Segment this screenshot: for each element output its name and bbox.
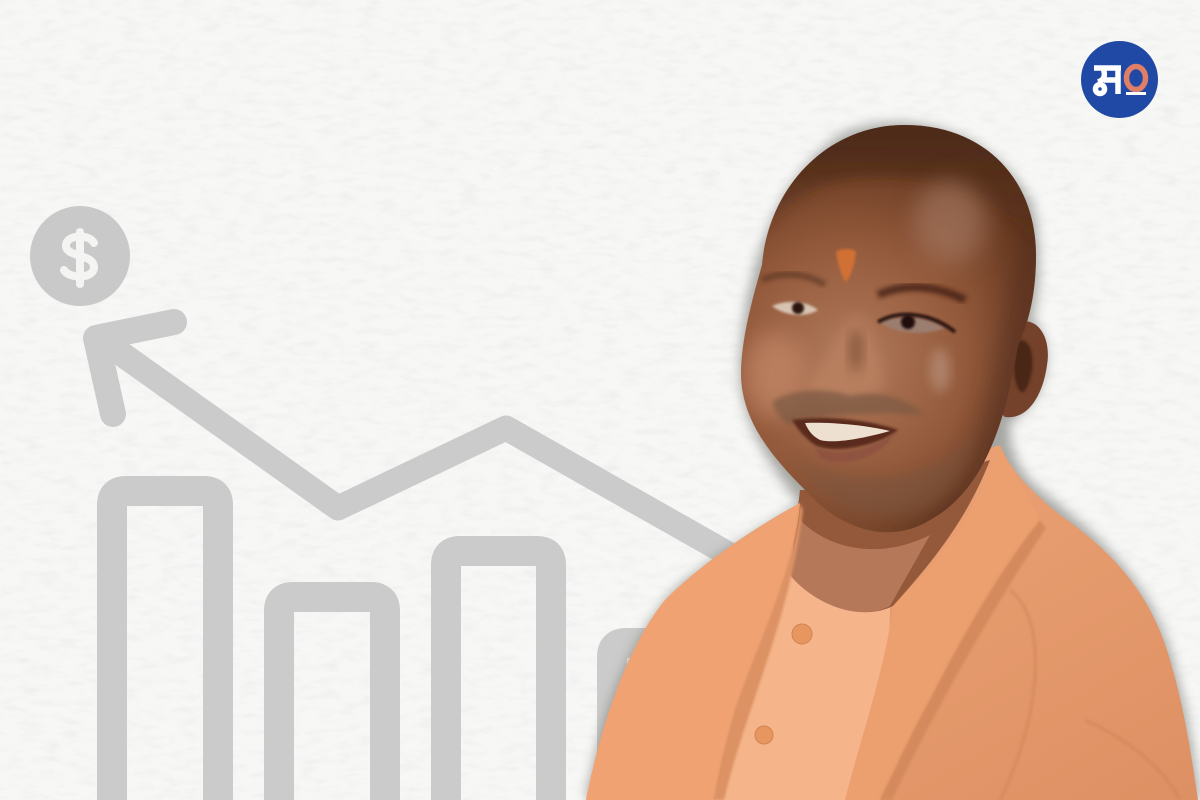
neck xyxy=(790,460,990,612)
icon: dollar coin xyxy=(30,206,130,306)
figure photo illustration xyxy=(586,120,1200,800)
lower lip xyxy=(817,437,891,462)
bar 4 xyxy=(612,643,700,800)
shoulder folds xyxy=(1000,590,1180,800)
tilak xyxy=(836,249,856,282)
bar chart xyxy=(112,491,700,800)
head xyxy=(741,125,1036,532)
robe body xyxy=(586,445,1198,800)
bar 3 xyxy=(446,551,551,800)
eyebrows xyxy=(762,275,825,285)
soft halo xyxy=(586,123,1200,800)
moustache xyxy=(772,391,925,425)
forehead highlight xyxy=(914,180,986,264)
cheek highlight right xyxy=(930,348,950,392)
buttons xyxy=(755,624,812,744)
right scarf xyxy=(845,445,1040,800)
left scarf xyxy=(586,503,800,800)
right eye xyxy=(880,317,945,333)
left cheek light xyxy=(743,333,807,417)
logo letter xyxy=(1094,68,1121,94)
left eye xyxy=(772,302,818,315)
logo badge xyxy=(1081,41,1158,118)
mouth xyxy=(792,418,898,449)
scalp shading xyxy=(771,125,1032,222)
nose xyxy=(812,318,882,396)
ear xyxy=(998,321,1048,417)
arrow: trend line xyxy=(96,322,760,572)
bar 2 xyxy=(279,597,385,800)
logo ring xyxy=(1126,66,1146,90)
chin stubble xyxy=(806,464,936,504)
inner kurta xyxy=(715,570,890,800)
bar 1 xyxy=(112,491,218,800)
right head shadow xyxy=(908,226,1036,529)
